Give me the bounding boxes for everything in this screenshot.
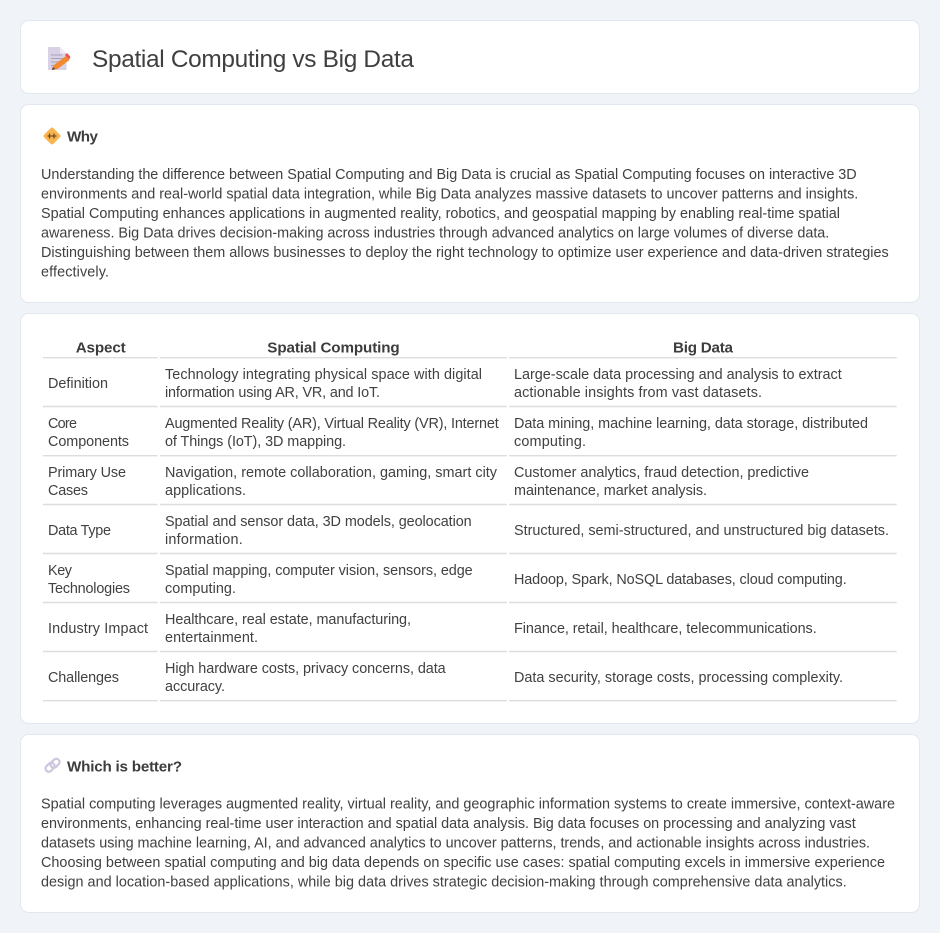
row: data type: Structured, semi-structured, and unstructured big datasets. (514, 523, 889, 539)
text block: which paragraph: Spatial computing leverages augmented reality, virtual reality, and geographic information systems to create immersive, context-aware (41, 796, 895, 812)
row: industry impact: entertainment. (165, 630, 258, 646)
text block: why paragraph: Distinguishing between them allows businesses to deploy the right technology to optimize user experience and data-driven strategies (41, 245, 889, 261)
row: key technologies: Key (48, 563, 73, 579)
text block: why paragraph: environments and real-world spatial data integration, while Big Data analyzes massive datasets to uncover patterns and insights. (41, 186, 858, 202)
heading: why: Why (67, 128, 99, 146)
row: industry impact: Industry Impact (48, 621, 148, 637)
table header: Big Data (673, 340, 734, 356)
row: primary use cases: applications. (165, 483, 246, 499)
table rules (43, 358, 897, 701)
icon: warning diamond (43, 127, 61, 145)
row: core components: Components (48, 434, 129, 450)
text block: why paragraph: Spatial Computing enhances applications in augmented reality, robotics, and geospatial mapping by enabling real-time spatial (41, 206, 840, 222)
icon: document with pencil (48, 47, 70, 70)
table header: Spatial Computing (267, 340, 400, 356)
row: challenges (48, 661, 843, 695)
row: primary use cases: Navigation, remote collaboration, gaming, smart city (165, 465, 498, 481)
text block: why paragraph: Understanding the difference between Spatial Computing and Big Data is crucial as Spatial Computing focuses on interactive 3D (41, 167, 857, 183)
row: key technologies: Hadoop, Spark, NoSQL databases, cloud computing. (514, 572, 847, 588)
row: definition: Definition (48, 376, 108, 392)
heading: which is better: Which is better? (67, 759, 182, 776)
row: core components: computing. (514, 434, 586, 450)
row: definition (48, 367, 842, 401)
text block: which paragraph: design and location-based applications, while big data drives strategic decision-making through comprehensive data analytics. (41, 874, 847, 890)
row: key technologies: Technologies (48, 581, 130, 597)
panel: why (20, 104, 920, 302)
row: core components: of Things (IoT), 3D mapping. (165, 434, 346, 450)
row: core components: Data mining, machine learning, data storage, distributed (514, 416, 868, 432)
row: industry impact: Healthcare, real estate, manufacturing, (165, 612, 411, 628)
row: challenges: High hardware costs, privacy concerns, data (165, 661, 446, 677)
row: data type: Data Type (48, 523, 111, 539)
text block: why paragraph (41, 167, 889, 280)
row: definition: Technology integrating physical space with digital (165, 367, 482, 383)
text block: why paragraph: awareness. Big Data drives decision-making across industries through advanced analytics on large volumes of diverse data. (41, 226, 829, 242)
row: challenges: Challenges (48, 670, 119, 686)
row: definition: actionable insights from vast datasets. (514, 385, 762, 401)
text block: which paragraph: environments, enhancing real-time user interaction and spatial data analysis. Big data focuses on processing and analyzing vast (41, 816, 856, 832)
row: data type: Spatial and sensor data, 3D models, geolocation (165, 514, 472, 530)
panel: comparison table (20, 314, 920, 724)
row: data type: information. (165, 532, 243, 548)
row: primary use cases: Cases (48, 483, 88, 499)
row: core components: Core (48, 416, 77, 432)
table header: Aspect (76, 340, 126, 356)
row: key technologies: Spatial mapping, computer vision, sensors, edge (165, 563, 473, 579)
row: primary use cases: Customer analytics, fraud detection, predictive (514, 465, 809, 481)
row: primary use cases: Primary Use (48, 465, 126, 481)
text block: which paragraph: Choosing between spatial computing and big data depends on specific use cases: spatial computing excels in immersive experience (41, 855, 885, 871)
panel: which is better (20, 734, 920, 912)
row: industry impact (48, 612, 817, 646)
title: Spatial Computing vs Big Data (92, 46, 414, 73)
text block: which paragraph: datasets using machine learning, AI, and advanced analytics to uncover patterns, trends, and actionable insights across industries. (41, 836, 870, 852)
row: key technologies: computing. (165, 581, 236, 597)
row: primary use cases: maintenance, market analysis. (514, 483, 707, 499)
text block: why paragraph: effectively. (41, 264, 109, 280)
row: definition: Large-scale data processing and analysis to extract (514, 367, 842, 383)
row: core components: Augmented Reality (AR), Virtual Reality (VR), Internet (165, 416, 499, 432)
row: core components (48, 416, 868, 450)
row: challenges: Data security, storage costs, processing complexity. (514, 670, 843, 686)
row: key technologies (48, 563, 847, 597)
row: data type (48, 514, 889, 548)
row: definition: information using AR, VR, and IoT. (165, 385, 380, 401)
row: primary use cases (48, 465, 809, 499)
table header (76, 340, 734, 356)
icon: link (44, 757, 61, 773)
row: industry impact: Finance, retail, healthcare, telecommunications. (514, 621, 817, 637)
panel: header (20, 20, 920, 94)
row: challenges: accuracy. (165, 679, 225, 695)
text block: which paragraph (41, 796, 895, 890)
